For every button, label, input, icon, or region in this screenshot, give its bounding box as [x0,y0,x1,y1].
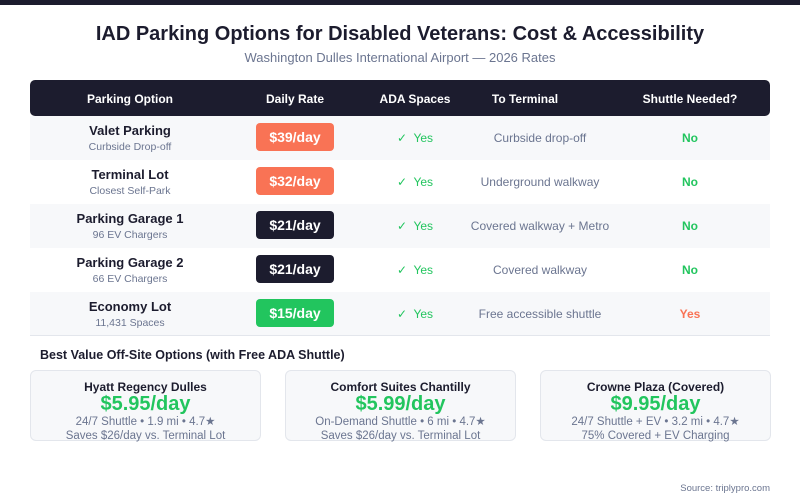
row: terminal lot: ✓ Yes [397,175,433,189]
row: terminal lot [89,167,698,197]
source: Source: triplypro.com [680,483,770,494]
table header: Daily Rate [266,92,324,106]
title: IAD Parking Options for Disabled Veterans: Cost & Accessibility [96,23,704,45]
row: terminal lot: $32/day [269,173,321,189]
row: terminal lot: Closest Self-Park [89,185,171,197]
row: garage 1: Parking Garage 1 [77,211,183,226]
row: garage 2: 66 EV Chargers [93,273,167,285]
row: economy: Yes [680,307,700,321]
card: crowne plaza: Crowne Plaza (Covered) [587,380,724,394]
row: valet: Curbside Drop-off [89,141,171,153]
row: garage 2: No [682,263,698,277]
card: hyatt: Hyatt Regency Dulles [84,380,207,394]
row: economy [30,292,770,336]
card: hyatt: Saves $26/day vs. Terminal Lot [66,430,225,442]
card: comfort suites: On-Demand Shuttle • 6 mi • 4.7★ [315,416,486,428]
row: garage 1 [30,204,770,248]
row: garage 1: ✓ Yes [397,219,433,233]
card: crowne plaza: 75% Covered + EV Charging [582,430,730,442]
subtitle: Washington Dulles International Airport — 2026 Rates [245,50,555,65]
card: hyatt: 24/7 Shuttle • 1.9 mi • 4.7★ [76,416,215,428]
row: garage 1: $21/day [269,217,321,233]
row: terminal lot: No [682,175,698,189]
row: economy: 11,431 Spaces [95,317,165,329]
card: crowne plaza: $9.95/day [610,393,701,415]
row: garage 2: $21/day [269,261,321,277]
card: crowne plaza [540,370,771,441]
row: economy: $15/day [269,305,321,321]
row: garage 2: Parking Garage 2 [77,255,183,270]
row: garage 1: 96 EV Chargers [93,229,167,241]
row: economy: Economy Lot [89,299,171,314]
row: garage 2 [77,255,698,285]
row: valet: Curbside drop-off [494,131,586,145]
row: valet [30,116,770,160]
card: crowne plaza: 24/7 Shuttle + EV • 3.2 mi • 4.7★ [571,416,740,428]
table header: Shuttle Needed? [643,92,737,106]
card: comfort suites: $5.99/day [355,393,446,415]
row: terminal lot: Underground walkway [481,175,599,189]
card: comfort suites [285,370,516,441]
row: terminal lot: Terminal Lot [91,167,169,182]
row: garage 1: Covered walkway + Metro [471,219,609,233]
row: garage 1: No [682,219,698,233]
table header: To Terminal [492,92,558,106]
card: hyatt [30,370,261,441]
row: garage 2: Covered walkway [493,263,587,277]
row: garage 2: ✓ Yes [397,263,433,277]
row: economy: ✓ Yes [397,307,433,321]
row: valet: Valet Parking [89,123,171,138]
row: valet: $39/day [269,129,321,145]
card: hyatt: $5.95/day [100,393,191,415]
row: economy: Free accessible shuttle [479,307,601,321]
card: comfort suites: Comfort Suites Chantilly [330,380,470,394]
table header: Parking Option [87,92,173,106]
table header: ADA Spaces [380,92,450,106]
table header [30,80,770,116]
row: valet: ✓ Yes [397,131,433,145]
section heading: Best Value Off-Site Options (with Free ADA Shuttle) [40,348,345,362]
card: comfort suites: Saves $26/day vs. Terminal Lot [321,430,480,442]
row: valet: No [682,131,698,145]
